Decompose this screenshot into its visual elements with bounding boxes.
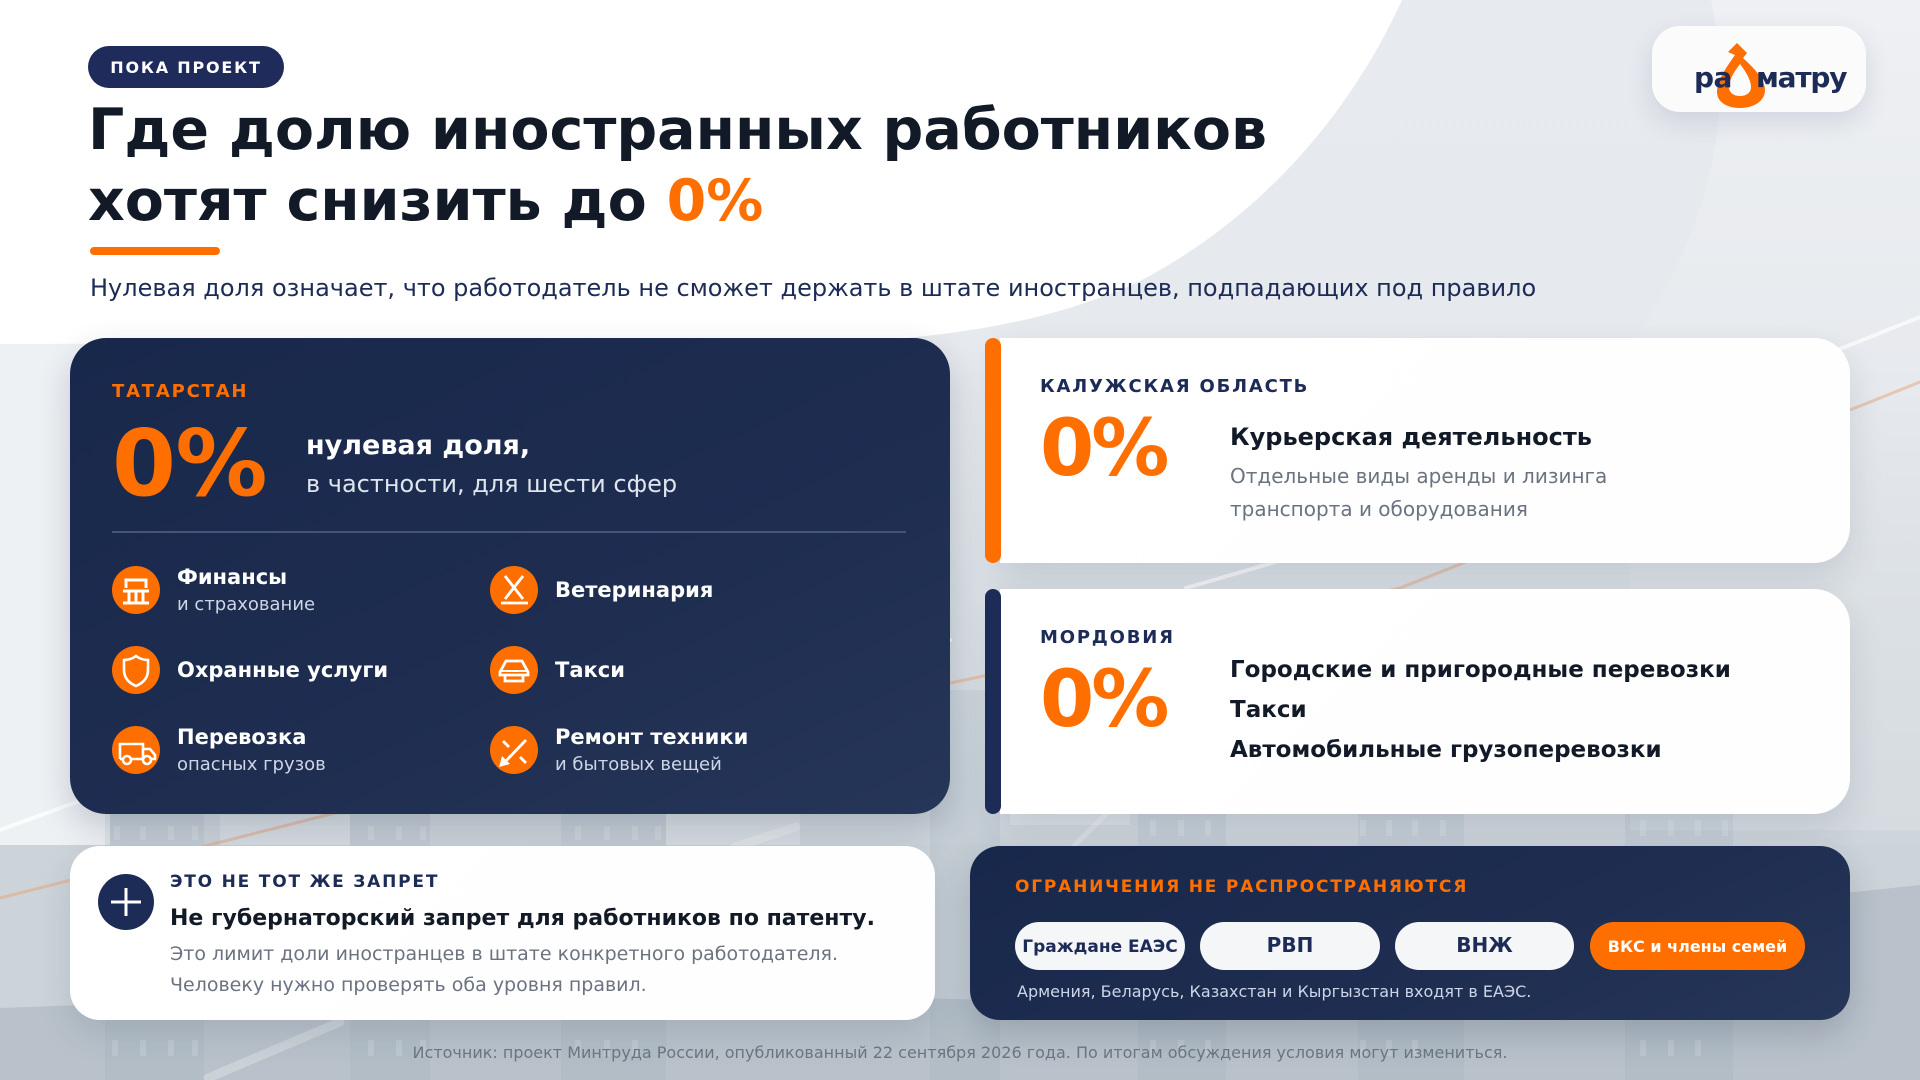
- logo: [1652, 26, 1866, 112]
- taxi text: Такси: [555, 658, 625, 682]
- Mordovia list: Городские и пригородные перевозки: [1230, 657, 1731, 683]
- security text: Охранные услуги: [177, 658, 388, 682]
- veterinary text: Ветеринария: [555, 578, 713, 602]
- icon: shield: [112, 646, 160, 694]
- region label: ТАТАРСТАН: [112, 381, 248, 402]
- Kaluga label: КАЛУЖСКАЯ ОБЛАСТЬ: [1040, 376, 1309, 397]
- icon: finance: [112, 566, 160, 614]
- Mordovia list: [1230, 657, 1731, 763]
- Kaluga number: 0%: [1040, 404, 1166, 494]
- pill: VNZh: ВНЖ: [1456, 933, 1513, 957]
- transport text: [177, 725, 326, 775]
- Mordovia list: Автомобильные грузоперевозки: [1230, 737, 1662, 763]
- icon: veterinary: [490, 566, 538, 614]
- Kaluga text: транспорта и оборудования: [1230, 497, 1528, 521]
- exemptions note: Армения, Беларусь, Казахстан и Кыргызстан входят в ЕАЭС.: [1017, 982, 1531, 1001]
- Mordovia label: МОРДОВИЯ: [1040, 627, 1175, 648]
- title: [88, 97, 1267, 234]
- exemptions heading: ОГРАНИЧЕНИЯ НЕ РАСПРОСТРАНЯЮТСЯ: [1015, 877, 1468, 897]
- status pill: ПОКА ПРОЕКТ: [110, 58, 262, 77]
- accent bar: Mordovia: [985, 589, 1001, 814]
- logo wordmark end: матру: [1756, 61, 1846, 94]
- Mordovia number: 0%: [1040, 655, 1166, 745]
- pill: VKS: ВКС и члены семей: [1608, 937, 1787, 956]
- title: хотят снизить до 0%: [88, 168, 763, 234]
- repair text: [555, 725, 748, 775]
- Mordovia list: Такси: [1230, 697, 1307, 723]
- icon: truck: [112, 726, 160, 774]
- transport text: Перевозка: [177, 725, 306, 749]
- panel: exemptions: [970, 846, 1850, 1020]
- icon: plus: [98, 874, 154, 930]
- headline: нулевая доля,: [306, 430, 530, 461]
- repair text: и бытовых вещей: [555, 754, 722, 775]
- finance text: Финансы: [177, 565, 287, 589]
- description: [170, 943, 838, 996]
- pill: VNZh: [1395, 922, 1574, 970]
- icon: taxi: [490, 646, 538, 694]
- Kaluga text: [1230, 464, 1607, 521]
- pill: EAEU: [1015, 922, 1185, 970]
- icon: repair: [490, 726, 538, 774]
- accent bar: Kaluga: [985, 338, 1001, 563]
- pill: VKS: [1590, 922, 1805, 970]
- finance text: и страхование: [177, 594, 315, 615]
- big number: 0%: [112, 410, 267, 517]
- repair text: Ремонт техники: [555, 725, 748, 749]
- transport text: опасных грузов: [177, 754, 326, 775]
- finance text: [177, 565, 315, 615]
- panel: not the same ban: [70, 846, 935, 1020]
- logo drop: [1717, 43, 1765, 108]
- panel: Tatarstan: [70, 338, 950, 814]
- pill: RVP: РВП: [1267, 933, 1313, 957]
- panel: Mordovia: [1000, 589, 1850, 814]
- Kaluga heading: Курьерская деятельность: [1230, 423, 1592, 451]
- subtitle: Нулевая доля означает, что работодатель не сможет держать в штате иностранцев, подпадающих под правило: [90, 274, 1536, 302]
- status pill: [88, 46, 284, 88]
- logo wordmark start: ра: [1694, 61, 1732, 94]
- description: Человеку нужно проверять оба уровня правил.: [170, 974, 647, 996]
- source note: Источник: проект Минтруда России, опубликованный 22 сентября 2026 года. По итогам обсуждения условия могут измениться.: [413, 1043, 1507, 1062]
- divider: [112, 531, 906, 533]
- title: Где долю иностранных работников: [88, 97, 1267, 163]
- panel: Kaluga: [1000, 338, 1850, 563]
- pill: EAEU: Граждане ЕАЭС: [1022, 937, 1178, 957]
- sub headline: в частности, для шести сфер: [306, 470, 677, 498]
- pill: RVP: [1200, 922, 1380, 970]
- title underline: [90, 247, 220, 255]
- Kaluga text: Отдельные виды аренды и лизинга: [1230, 464, 1607, 488]
- description: Это лимит доли иностранцев в штате конкретного работодателя.: [170, 943, 838, 965]
- label: ЭТО НЕ ТОТ ЖЕ ЗАПРЕТ: [170, 872, 439, 892]
- heading: Не губернаторский запрет для работников по патенту.: [170, 906, 875, 931]
